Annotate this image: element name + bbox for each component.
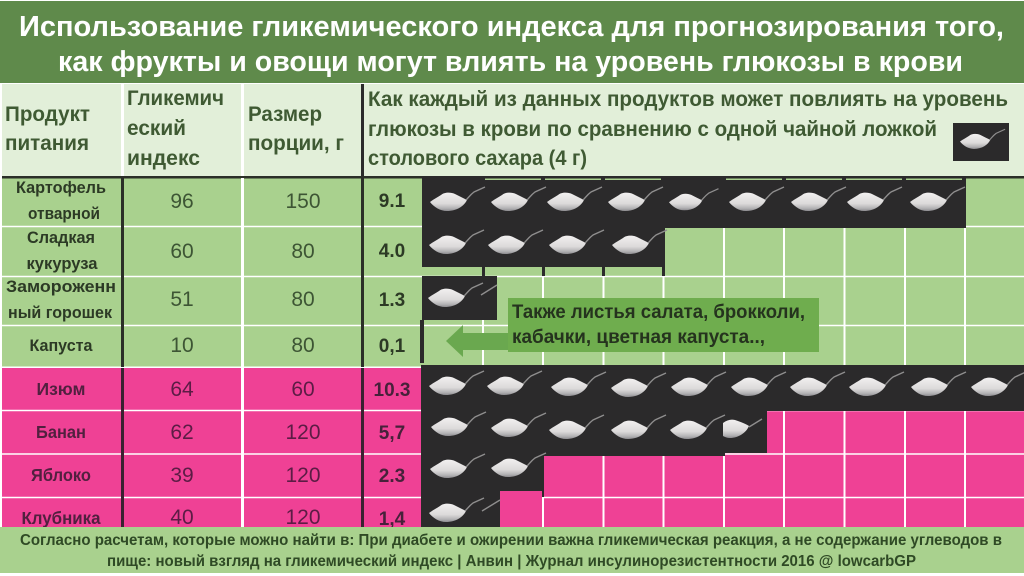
vegetable glycemic index and portion values: 80	[291, 240, 315, 263]
footer: source note: Согласно расчетам, которые можно найти в: При диабете и ожирении важна гликемическая реакция, а не содержание углеводов в	[20, 532, 1002, 549]
title banner: как фрукты и овощи могут влиять на уровень глюкозы в крови	[58, 46, 963, 78]
vegetable row labels: ный горошек	[8, 304, 113, 322]
fruit sugar teaspoon values: 5,7	[379, 423, 405, 444]
vegetable sugar teaspoon values: 4.0	[379, 241, 405, 262]
vegetable row labels: кукуруза	[26, 255, 98, 273]
fruit glycemic index and portion values: 64	[170, 378, 194, 401]
title banner: Использование гликемического индекса для прогнозирования того,	[19, 11, 1004, 43]
fruit row labels: Яблоко	[31, 465, 91, 485]
fruit sugar teaspoon values: 2.3	[379, 466, 405, 487]
vegetable row labels	[6, 179, 116, 355]
vegetable glycemic index and portion values	[170, 190, 321, 357]
callout: other vegetables: Также листья салата, брокколи,	[512, 302, 805, 323]
fruit glycemic index and portion values: 62	[170, 421, 194, 444]
table header: порции, г	[248, 132, 344, 155]
fruit glycemic index and portion values: 39	[170, 464, 194, 487]
vegetable sugar teaspoon values: 9.1	[379, 191, 406, 212]
footer: source note: пище: новый взгляд на гликемический индекс | Анвин | Журнал инсулинорезистентности 2016 @ lowcarbGP	[107, 553, 916, 570]
spoons: banana, 5.7	[421, 411, 767, 456]
vegetable row labels: Капуста	[30, 337, 93, 355]
spoons: apple, 2.3	[421, 453, 546, 497]
vegetable row labels: Сладкая	[27, 229, 95, 247]
vegetable glycemic index and portion values: 96	[170, 190, 194, 213]
spoons: strawberry, 1.4	[421, 491, 544, 527]
footer: source note	[0, 527, 1024, 573]
vegetable glycemic index and portion values: 60	[170, 240, 194, 263]
arrow: pointing to cabbage row	[446, 325, 510, 357]
fruit glycemic index and portion values: 40	[170, 506, 194, 529]
title banner	[0, 1, 1024, 83]
table header: еский	[127, 117, 186, 140]
fruit glycemic index and portion values: 120	[285, 464, 321, 487]
callout: other vegetables: кабачки, цветная капуста..,	[512, 327, 765, 348]
table header: Как каждый из данных продуктов может повлиять на уровень	[368, 88, 1008, 111]
fruit glycemic index and portion values	[170, 378, 321, 529]
vegetable sugar teaspoon values	[379, 191, 406, 357]
fruit row labels: Изюм	[36, 379, 86, 399]
vegetable row labels: отварной	[28, 205, 100, 223]
icon: legend teaspoon of sugar	[953, 123, 1009, 161]
table header: столового сахара (4 г)	[368, 147, 587, 170]
table header: питания	[5, 132, 89, 155]
table header: индекс	[127, 147, 200, 170]
vegetable glycemic index and portion values: 10	[170, 334, 194, 357]
table header: Продукт	[5, 103, 90, 126]
fruit glycemic index and portion values: 120	[285, 421, 321, 444]
panel: fruits rows background	[2, 368, 1024, 527]
table header: Гликемич	[127, 87, 224, 110]
callout: other vegetables	[508, 298, 819, 352]
fruit glycemic index and portion values: 120	[285, 506, 321, 529]
fruit sugar teaspoon values	[374, 380, 410, 530]
panel: vegetables rows background	[2, 176, 1024, 367]
fruit row labels: Банан	[36, 422, 86, 442]
table header: Размер	[248, 103, 322, 126]
fruit glycemic index and portion values: 60	[291, 378, 315, 401]
vegetable row labels: Замороженн	[6, 278, 116, 296]
table header	[2, 84, 1024, 178]
vegetable sugar teaspoon values: 0,1	[379, 336, 406, 357]
spoons: potato, 9.1	[422, 176, 966, 228]
spoons: raisins, 10.3	[421, 365, 1024, 411]
vegetable glycemic index and portion values: 80	[291, 288, 315, 311]
spoons: sweet corn, 4.0	[422, 228, 667, 276]
vegetable glycemic index and portion values: 51	[170, 288, 194, 311]
vegetable sugar teaspoon values: 1.3	[379, 290, 405, 311]
spoons: frozen peas, 1.3	[420, 276, 497, 363]
table header: глюкозы в крови по сравнению с одной чайной ложкой	[368, 118, 937, 141]
fruit sugar teaspoon values: 1,4	[379, 509, 406, 530]
fruit sugar teaspoon values: 10.3	[374, 380, 410, 401]
vegetable glycemic index and portion values: 80	[291, 334, 315, 357]
vegetable row labels: Картофель	[16, 179, 106, 197]
fruit row labels	[22, 379, 101, 528]
fruit row labels: Клубника	[22, 508, 101, 528]
vegetable glycemic index and portion values: 150	[285, 190, 321, 213]
